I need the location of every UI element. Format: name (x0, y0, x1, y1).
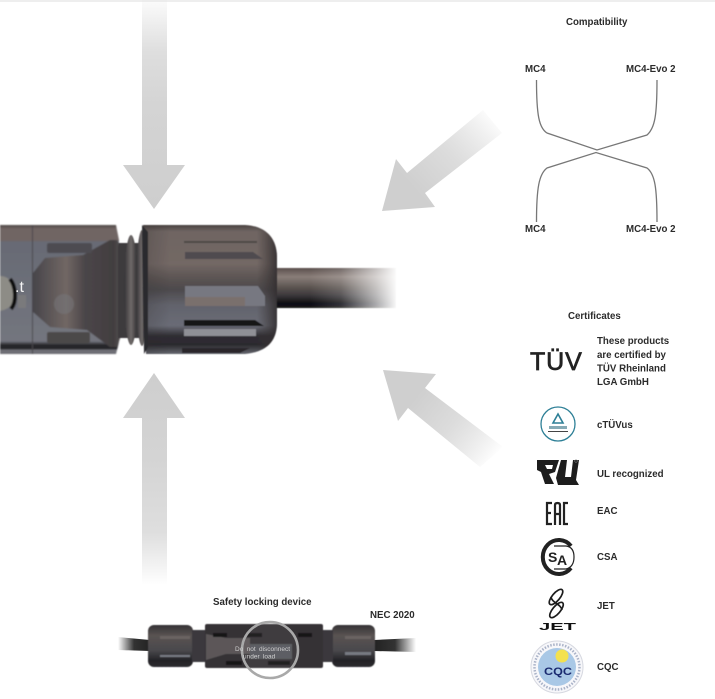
connector body (0, 225, 128, 354)
arrow: bottom (123, 373, 185, 585)
certificates panel (530, 311, 672, 693)
logo: JET: JET (539, 621, 577, 633)
logo: CQC: CQC (544, 666, 572, 678)
logo: JET (539, 587, 577, 633)
text: TUV certification: are certified by (597, 350, 667, 361)
heading: safety locking device: Safety locking device (213, 597, 312, 608)
locking ring callout: Do not disconnect (235, 646, 290, 653)
label: NEC 2020: NEC 2020 (370, 610, 415, 621)
connector cable (274, 264, 398, 312)
logo: CSA: A (557, 552, 567, 568)
text: TUV certification: TÜV Rheinland (597, 364, 666, 374)
connector rings (118, 230, 148, 346)
logo: UL (537, 460, 579, 485)
logo: CSA (543, 540, 574, 574)
arrow: lower right (383, 370, 503, 467)
logo: CQC (531, 641, 583, 693)
label: JET: JET (597, 601, 615, 612)
small connector image (118, 624, 416, 668)
label: MC4-Evo 2 bottom: MC4-Evo 2 (626, 224, 676, 235)
heading: certificates: Certificates (568, 311, 621, 322)
label: cTUVus: cTÜVus (597, 420, 633, 431)
label: MC4 top: MC4 (525, 64, 546, 75)
label: CQC: CQC (597, 662, 619, 673)
locking ring callout (235, 622, 298, 678)
arrow: top (123, 0, 185, 209)
locking ring callout: under load (243, 654, 276, 660)
heading: compatibility: Compatibility (566, 17, 628, 28)
label: EAC: EAC (597, 506, 617, 517)
logo: TUV: TÜV (530, 348, 583, 376)
label: MC4 bottom: MC4 (525, 224, 546, 235)
logo: EAC (547, 503, 568, 525)
connector text fragment: .t (15, 279, 24, 296)
connector nut (142, 225, 277, 354)
text: TUV certification: These products (597, 336, 669, 347)
text: TUV certification: LGA GmbH (597, 377, 649, 388)
label: CSA: CSA (597, 552, 617, 563)
safety locking device panel (118, 597, 416, 678)
label: UL recognized: UL recognized (597, 469, 664, 480)
compatibility panel (525, 17, 676, 235)
logo: CSA: S (548, 549, 557, 565)
main connector (0, 225, 398, 354)
label: MC4-Evo 2 top: MC4-Evo 2 (626, 64, 676, 75)
arrow: upper right (382, 110, 502, 211)
compatibility lines (536, 80, 657, 222)
logo: cTUVus (541, 407, 575, 441)
